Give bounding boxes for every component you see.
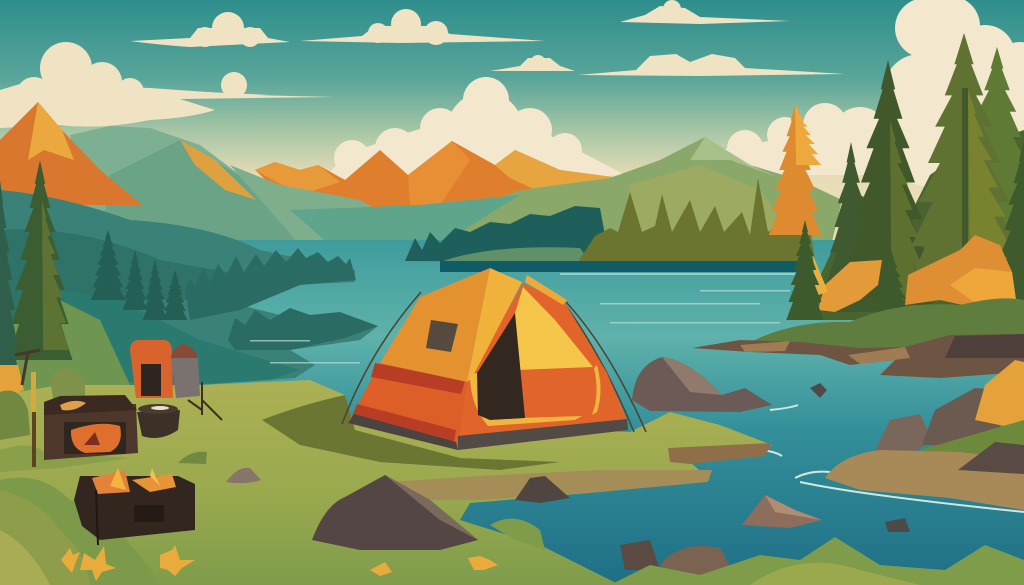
orange tree	[769, 105, 821, 235]
left tall conifers	[0, 160, 188, 380]
lake water	[0, 240, 1024, 585]
water ripples: right	[740, 405, 1024, 512]
rock: shore small	[515, 476, 570, 503]
tent right-side orange body	[458, 283, 628, 450]
conifers: foreground small	[786, 220, 911, 325]
lower-left shrubs	[0, 478, 160, 585]
conifer: tall right tree	[904, 33, 1024, 293]
large boulder foreground	[312, 475, 478, 550]
right shore: lower rocks and sand	[810, 360, 1024, 532]
tent yellow door panel	[515, 287, 593, 370]
distant conifers: left shore	[185, 248, 356, 320]
camp stove box	[44, 395, 138, 460]
rock: in water	[742, 495, 822, 528]
conifer group: right forest canopy	[800, 130, 1024, 320]
backpack	[130, 340, 173, 398]
tent roof cap	[525, 275, 567, 305]
conifer: slim tree	[824, 142, 878, 312]
tent window	[426, 320, 458, 352]
right bank: rocky shore	[692, 334, 1024, 378]
storage crate	[74, 468, 195, 545]
orange bushes	[813, 235, 1016, 312]
water highlights	[250, 273, 795, 364]
sky	[0, 0, 1024, 300]
tent lower front-left panel	[348, 363, 467, 450]
yellow post	[15, 350, 40, 467]
foreground grass	[0, 380, 772, 585]
tan shoreline	[390, 443, 772, 500]
forested hills: left shore	[0, 190, 378, 395]
mountains: far teal-green left	[70, 126, 240, 240]
small grass tuft and rocks	[178, 452, 261, 483]
hills: teal far shore	[290, 195, 520, 245]
tent	[342, 268, 646, 450]
mountains: orange peak left	[0, 102, 142, 205]
right bank: green	[745, 298, 1024, 350]
mountains: green ridge left	[100, 140, 430, 250]
left foliage behind gear	[0, 365, 130, 472]
conifer: large dark tree	[843, 60, 933, 305]
cast-iron pot	[137, 404, 180, 438]
mountains: green ridge right	[440, 137, 842, 250]
far-shore forest	[405, 178, 815, 262]
grass clump at shoreline	[490, 519, 545, 550]
mountains: orange range centre	[255, 141, 620, 212]
clouds: upper wisps	[0, 0, 845, 128]
clouds: horizon bank	[325, 0, 1024, 186]
tent door opening	[477, 313, 525, 420]
tent shadow	[262, 395, 560, 470]
bottom grass and rocks right	[610, 537, 1024, 585]
yellow leaves	[61, 545, 498, 581]
reflection band	[440, 261, 800, 272]
rock: boulder behind tent	[632, 357, 772, 412]
conifer: right edge tree	[992, 140, 1024, 320]
conifer: far right tree	[957, 47, 1024, 227]
tent poles	[342, 292, 646, 432]
tent door outline	[470, 373, 582, 426]
tent upper left roof	[380, 268, 490, 382]
cooking pot on stand	[171, 344, 222, 420]
